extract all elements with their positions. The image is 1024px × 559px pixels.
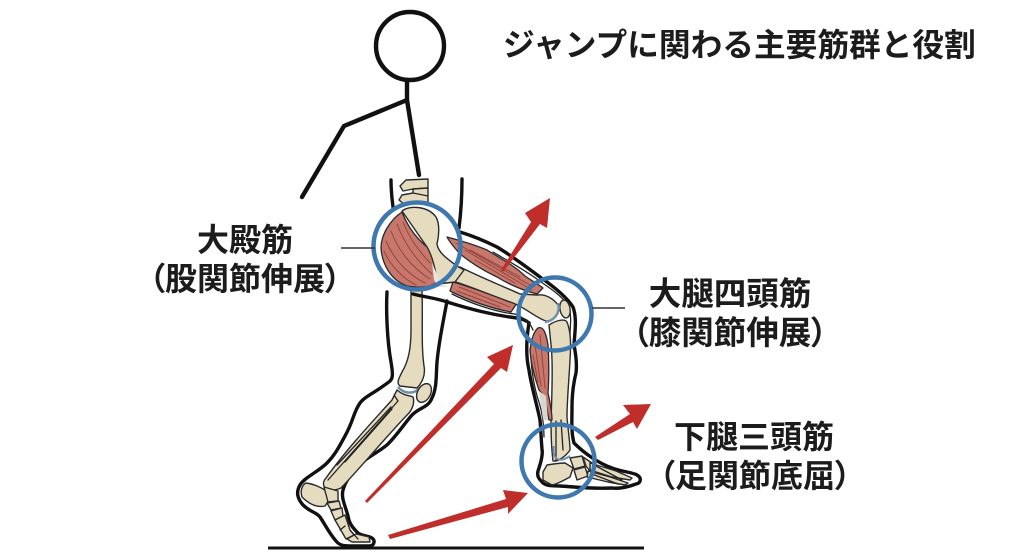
stick figure upper body	[302, 12, 444, 197]
label: gluteus: （股関節伸展）	[149, 254, 341, 300]
arrow: foot to ankle	[388, 490, 528, 539]
standing tibia and fibula	[323, 390, 414, 490]
ground line	[268, 546, 644, 550]
label: quadriceps	[632, 276, 828, 354]
standing foot bones	[301, 483, 370, 542]
gluteus maximus muscle	[381, 212, 437, 287]
bent leg	[413, 232, 640, 488]
leader line: knee	[592, 307, 625, 309]
arrow: thigh up	[501, 198, 550, 272]
pelvis bone	[402, 207, 464, 284]
standing leg outline	[298, 292, 447, 546]
glute and hip	[381, 207, 464, 287]
bent leg outline	[460, 232, 640, 488]
label: triceps surae: 下腿三頭筋	[674, 419, 834, 455]
tendon highlights	[432, 263, 448, 287]
label: quadriceps: （膝関節伸展）	[632, 307, 828, 354]
lower leg tibia	[549, 320, 571, 461]
inner outline lines	[531, 345, 544, 437]
label: triceps surae	[659, 419, 851, 497]
arrow: ankle outward	[595, 404, 651, 440]
leader line: glute	[341, 247, 375, 249]
label: triceps surae: （足関節底屈）	[659, 451, 851, 497]
label: quadriceps: 大腿四頭筋	[649, 276, 811, 312]
standing femur	[398, 290, 424, 388]
calf muscle	[530, 328, 552, 420]
blue circle: knee	[518, 278, 592, 350]
standing knee cartilage	[398, 387, 421, 393]
torso outline	[391, 179, 462, 228]
blue circle: hip	[374, 202, 460, 290]
standing patella	[414, 381, 434, 405]
blue circle: ankle	[522, 424, 594, 498]
standing leg	[298, 290, 447, 546]
title: ジャンプに関わる主要筋群と役割	[503, 27, 976, 63]
knee bones	[545, 299, 571, 322]
arrow: shin diagonal	[365, 345, 513, 503]
lower thigh muscle	[450, 282, 517, 312]
ankle and foot bones	[543, 420, 632, 485]
quadriceps muscle	[447, 237, 543, 294]
label: gluteus	[149, 222, 341, 300]
thigh bone	[453, 267, 558, 321]
label: gluteus: 大殿筋	[197, 222, 293, 258]
spine vertebrae	[399, 179, 428, 204]
